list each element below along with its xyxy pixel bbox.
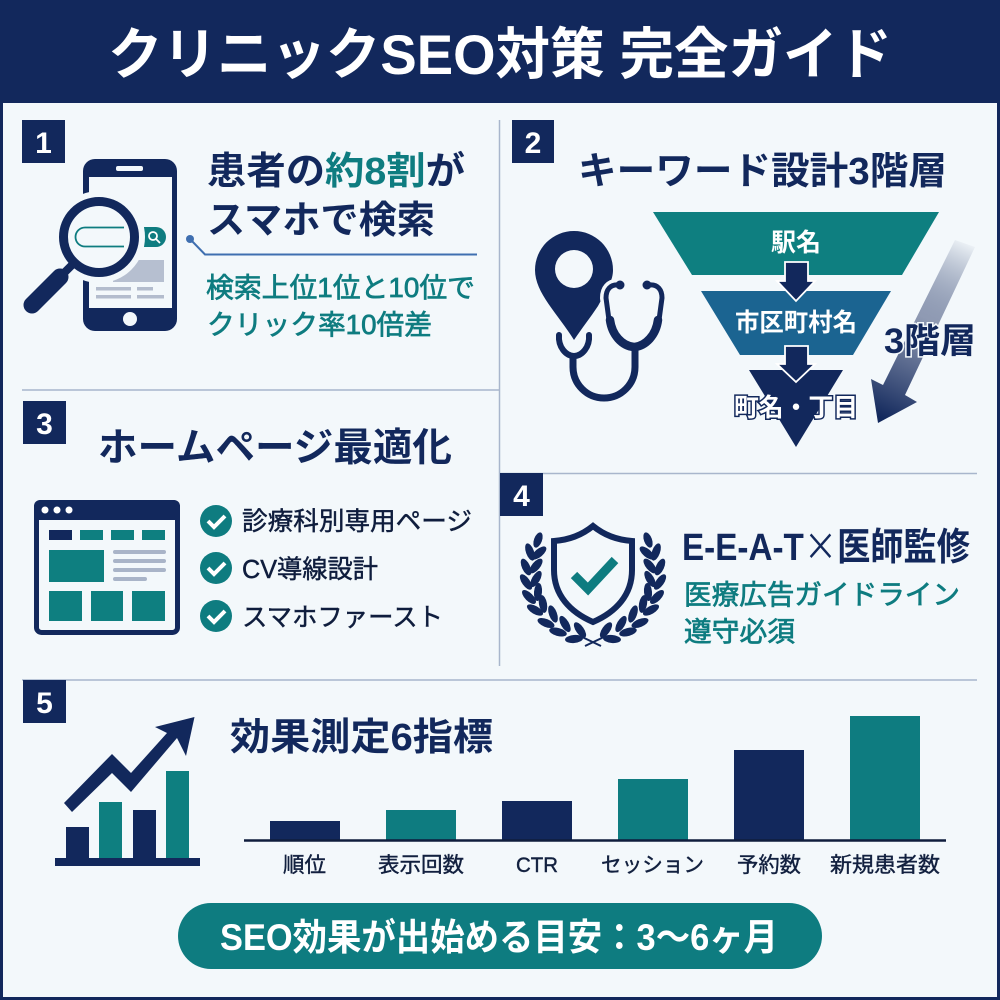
panel: measurement	[23, 680, 946, 969]
title: クリニックSEO対策 完全ガイド	[108, 23, 892, 86]
funnel label: town: 町名・丁目	[734, 394, 858, 422]
axis labels: セッション	[601, 854, 704, 877]
callout	[178, 903, 822, 969]
check item 2	[200, 552, 378, 584]
subtext: click rate	[206, 272, 475, 340]
badge 3: 3	[36, 408, 53, 441]
badge 4	[500, 473, 543, 516]
bar chart	[244, 716, 946, 877]
subtext: click rate: 検索上位1位と10位で	[206, 272, 475, 303]
axis labels: CTR	[516, 854, 558, 877]
badge 5: 5	[36, 687, 53, 720]
laurel right	[598, 531, 668, 644]
subtext: guideline: 医療広告ガイドライン	[684, 579, 960, 610]
badge 4: 4	[513, 480, 530, 513]
badge 3	[23, 401, 66, 444]
connector line	[186, 235, 477, 254]
panel: E-E-A-T	[500, 473, 970, 647]
subtext: guideline	[684, 579, 960, 647]
icon: browser window	[34, 500, 180, 632]
subtext: click rate: クリック率10倍差	[207, 309, 432, 340]
laurel left	[518, 531, 588, 644]
axis labels	[283, 854, 940, 877]
funnel label: city: 市区町村名	[735, 309, 857, 337]
axis labels: 新規患者数	[830, 854, 940, 877]
icon: smartphone with magnifier	[32, 159, 177, 331]
heading: E-E-A-T: E-E-A-T×医師監修	[682, 516, 970, 571]
callout: SEO効果が出始める目安：3〜6ヶ月	[220, 917, 778, 958]
panel: website optimisation	[23, 401, 472, 632]
badge 1: 1	[35, 127, 52, 160]
check item 2: CV導線設計	[242, 556, 378, 584]
badge 2	[512, 120, 554, 163]
icon: growth chart	[55, 717, 200, 866]
icon: stethoscope	[559, 282, 662, 398]
heading: six metrics: 効果測定6指標	[230, 717, 493, 759]
arrow: level 1 to 2	[777, 262, 815, 301]
axis labels: 表示回数	[378, 854, 464, 877]
funnel	[653, 212, 939, 447]
badge 2: 2	[525, 127, 541, 160]
header banner	[0, 0, 1000, 103]
heading: patients: スマホで検索	[207, 200, 435, 242]
panel: keyword design	[512, 120, 976, 447]
heading: keyword: キーワード設計3階層	[578, 151, 947, 193]
heading: homepage: ホームページ最適化	[98, 427, 452, 470]
check item 3: スマホファースト	[242, 604, 443, 632]
arrow: three levels diagonal	[871, 240, 975, 423]
axis labels: 順位	[283, 854, 326, 877]
arrow: level 2 to 3	[777, 346, 815, 382]
icon: map pin	[535, 231, 613, 340]
heading: patients	[207, 151, 465, 242]
label: three levels: 3階層	[884, 322, 976, 361]
subtext: guideline: 遵守必須	[684, 616, 795, 647]
funnel label: station: 駅名	[771, 229, 821, 257]
axis labels: 予約数	[737, 854, 801, 877]
checklist	[200, 505, 472, 632]
badge 5	[23, 680, 66, 723]
badge 1	[22, 120, 65, 163]
check item 1: 診療科別専用ページ	[242, 508, 472, 536]
panel: patient smartphone search	[22, 120, 477, 340]
heading: patients: 患者の約8割が	[207, 151, 465, 193]
icon: shield with laurel	[518, 526, 668, 646]
